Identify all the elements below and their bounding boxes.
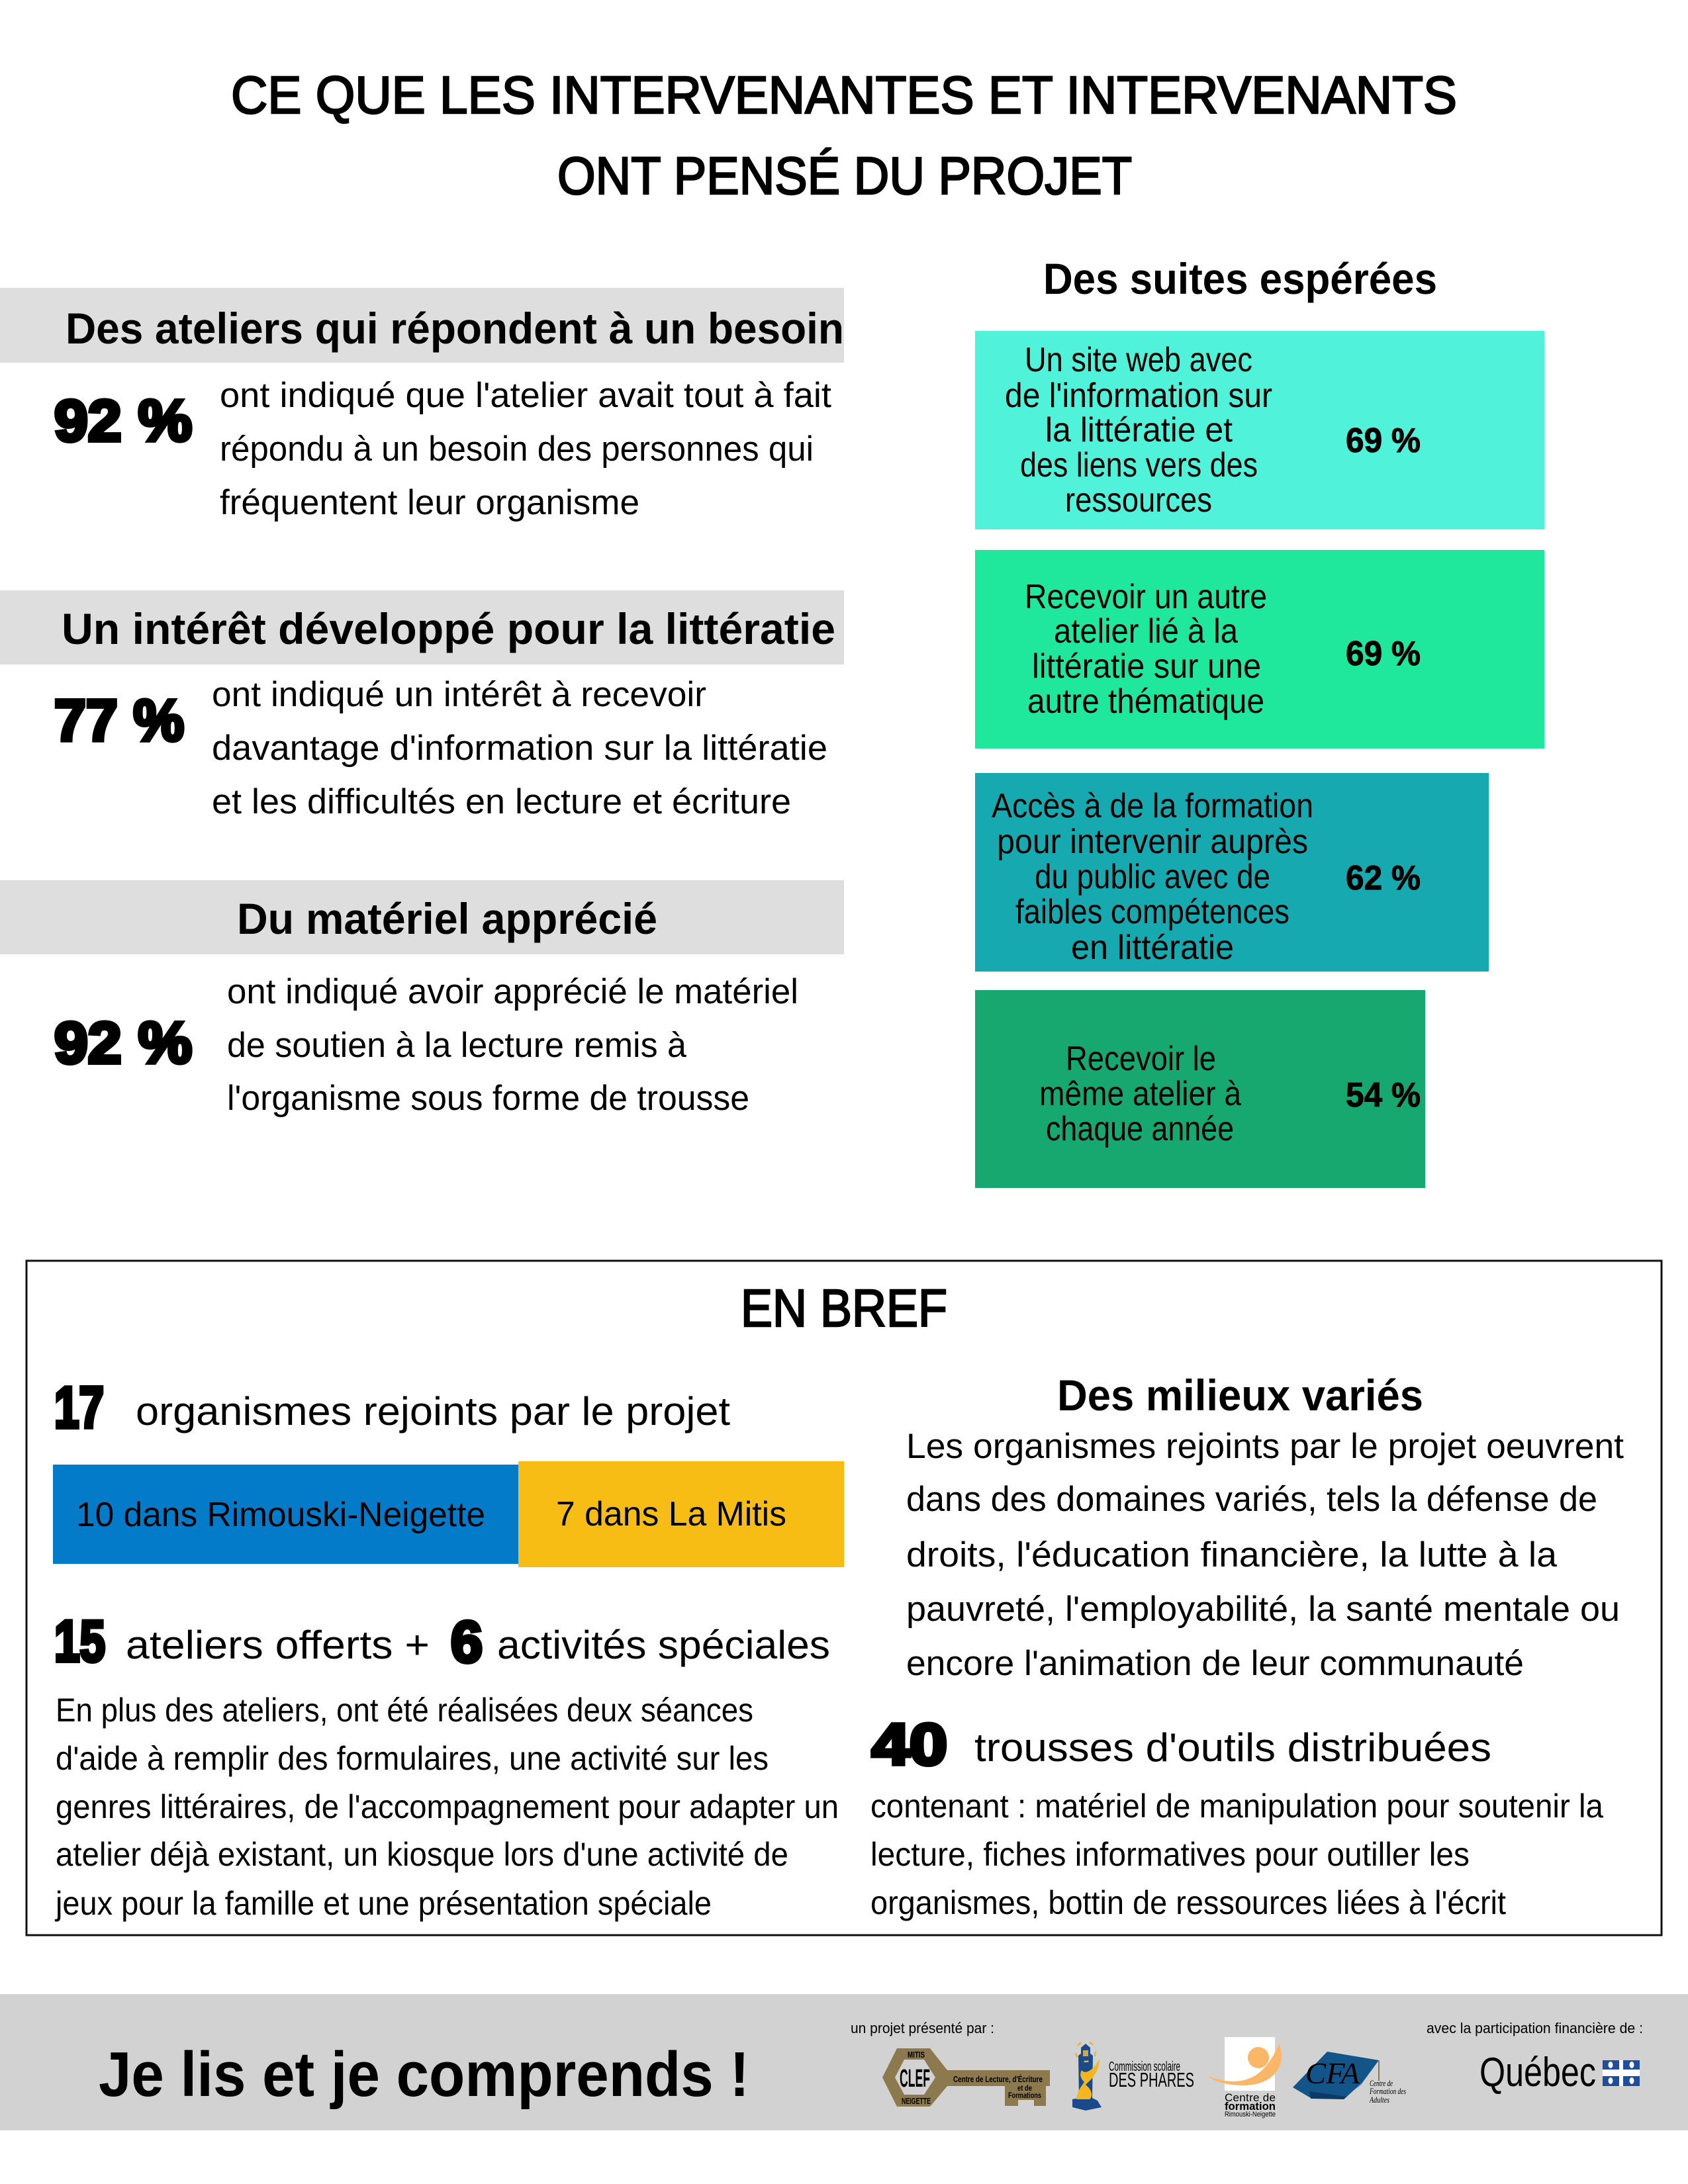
bar: autre atelier 69 %: atelier lié à la — [1054, 612, 1238, 651]
logo: CFA cap: Centre de — [1370, 2078, 1393, 2088]
heading: du matériel apprécié — [0, 880, 844, 954]
logo: commission scolaire des phares: Commission scolaire — [1109, 2060, 1180, 2074]
panel: intérêt — [0, 590, 844, 821]
bar: autre atelier 69 %: autre thématique — [1027, 682, 1264, 721]
stat: 40 trousses: 40 — [872, 1711, 947, 1777]
logo: commission scolaire des phares — [1109, 2060, 1194, 2091]
bar: formation 62 %: en littératie — [1071, 929, 1234, 967]
bar: même atelier 54 %: Recevoir le — [1066, 1040, 1216, 1078]
heading: des milieux variés: Des milieux variés — [1057, 1371, 1423, 1420]
logo: CFA cap: CFA — [1305, 2056, 1360, 2090]
logo: commission scolaire des phares: DES PHARES — [1109, 2068, 1194, 2091]
stat: 40 trousses: trousses d'outils distribuées — [974, 1725, 1491, 1770]
logo: centre de formation: Centre de — [1225, 2091, 1276, 2104]
logo: lighthouse — [1072, 2042, 1102, 2111]
heading: un intérêt développé pour la littératie: Un intérêt développé pour la littératie — [62, 604, 835, 653]
caption: présenté par: un projet présenté par : — [851, 2020, 994, 2036]
heading: un intérêt développé pour la littératie — [0, 590, 844, 664]
stat: 17 organismes: 17 — [54, 1375, 104, 1440]
logo: centre de formation — [1207, 2037, 1282, 2118]
heading: du matériel apprécié: Du matériel apprécié — [237, 894, 657, 943]
logo: CLEF key: et de — [1017, 2083, 1032, 2093]
logo: Québec: Québec — [1479, 2050, 1596, 2095]
stat: 92 %: 92 % — [54, 388, 192, 453]
bar: formation 62 %: faibles compétences — [1015, 893, 1289, 931]
footer title: Je lis et je comprends ! — [99, 2039, 749, 2110]
stat: 40 trousses — [872, 1711, 1491, 1777]
text block: matériel: de soutien à la lecture remis à — [227, 1026, 687, 1065]
bar: formation 62 %: Accès à de la formation — [992, 787, 1313, 825]
bar: site web 69 %: 69 % — [1346, 422, 1421, 460]
bar: même atelier 54 %: 54 % — [1346, 1076, 1421, 1115]
text block: matériel: ont indiqué avoir apprécié le matériel — [227, 972, 798, 1011]
bar: autre atelier 69 %: Recevoir un autre — [1025, 578, 1267, 616]
bar chart: suites espérées — [975, 331, 1544, 1188]
stacked bar: répartition des organismes: 7 dans La Mitis — [556, 1495, 786, 1533]
text block: intérêt — [212, 675, 827, 821]
panel: en bref — [26, 1261, 1662, 1935]
text block: ateliers: d'aide à remplir des formulaires, une activité sur les — [56, 1740, 769, 1777]
text block: intérêt: ont indiqué un intérêt à recevoir — [212, 675, 706, 714]
text block: trousses: organismes, bottin de ressources liées à l'écrit — [870, 1884, 1506, 1921]
bar: formation 62 %: pour intervenir auprès — [997, 823, 1308, 861]
bar: site web 69 %: de l'information sur — [1005, 377, 1272, 415]
text block: trousses: lecture, fiches informatives pour outiller les — [870, 1836, 1470, 1873]
stacked bar: répartition des organismes — [53, 1461, 844, 1567]
logo: CFA cap — [1293, 2052, 1406, 2105]
stat: 92 %: 92 % — [54, 1010, 192, 1075]
stat: 15 ateliers et 6 activités: ateliers offerts + — [126, 1623, 430, 1667]
stat: 15 ateliers et 6 activités: 15 — [54, 1608, 105, 1674]
bar: site web 69 %: ressources — [1065, 481, 1212, 520]
heading: en bref: EN BREF — [741, 1279, 947, 1338]
panel: matériel — [0, 880, 844, 1118]
text block: trousses: contenant : matériel de manipulation pour soutenir la — [870, 1788, 1603, 1825]
text block: ateliers: genres littéraires, de l'accompagnement pour adapter un — [56, 1788, 839, 1825]
text block: milieux: encore l'animation de leur communauté — [906, 1644, 1524, 1683]
logo: CLEF key — [882, 2048, 1050, 2107]
bar: site web 69 %: Un site web avec — [1025, 341, 1252, 379]
stat: 15 ateliers et 6 activités — [54, 1608, 830, 1674]
text block: milieux: pauvreté, l'employabilité, la santé mentale ou — [906, 1590, 1620, 1629]
bar: autre atelier 69 % — [975, 550, 1544, 749]
text block: milieux: droits, l'éducation financière, la lutte à la — [906, 1535, 1558, 1574]
text block: intérêt: davantage d'information sur la littératie — [212, 729, 827, 768]
heading: des ateliers qui répondent à un besoin: Des ateliers qui répondent à un besoin — [66, 304, 844, 353]
bar: site web 69 % — [975, 331, 1544, 529]
panel: besoin — [0, 288, 844, 522]
text block: ateliers — [54, 1692, 839, 1922]
bar: même atelier 54 % — [975, 990, 1425, 1188]
bar: site web 69 %: la littératie et — [1045, 411, 1233, 449]
title: CE QUE LES INTERVENANTES ET INTERVENANTS — [231, 66, 1457, 124]
text block: ateliers: jeux pour la famille et une présentation spéciale — [54, 1885, 712, 1922]
text block: matériel: l'organisme sous forme de trousse — [227, 1079, 749, 1118]
text block: besoin: ont indiqué que l'atelier avait tout à fait — [220, 376, 831, 415]
stat: 17 organismes: organismes rejoints par le projet — [136, 1389, 730, 1433]
footer — [0, 1994, 1688, 2130]
text block: milieux: Les organismes rejoints par le projet oeuvrent — [906, 1427, 1624, 1466]
logo: centre de formation: Rimouski-Neigette — [1225, 2111, 1276, 2118]
logo: CLEF key: CLEF — [900, 2065, 930, 2093]
logo: CLEF key: NEIGETTE — [902, 2096, 931, 2106]
text block: besoin: répondu à un besoin des personnes qui — [220, 430, 814, 469]
caption: participation financière: avec la participation financière de : — [1427, 2020, 1643, 2036]
stacked bar: répartition des organismes: 10 dans Rimouski-Neigette — [76, 1496, 485, 1534]
title: ONT PENSÉ DU PROJET — [557, 146, 1132, 205]
text block: milieux: dans des domaines variés, tels la défense de — [906, 1480, 1597, 1519]
logo: centre de formation: formation — [1225, 2100, 1276, 2113]
bar: formation 62 % — [975, 773, 1489, 972]
text block: besoin: fréquentent leur organisme — [220, 483, 639, 522]
logo: CLEF key: MITIS — [908, 2050, 925, 2060]
bar: formation 62 %: 62 % — [1346, 859, 1421, 897]
logo: CFA cap: Formation des — [1369, 2086, 1406, 2096]
bar: autre atelier 69 %: 69 % — [1346, 635, 1421, 673]
text block: ateliers: En plus des ateliers, ont été réalisées deux séances — [56, 1692, 753, 1729]
logo: CFA cap: Adultes — [1369, 2095, 1389, 2105]
text block: trousses — [870, 1788, 1603, 1921]
title — [231, 66, 1457, 205]
stat: 77 %: 77 % — [54, 688, 184, 753]
text block: intérêt: et les difficultés en lecture et écriture — [212, 782, 791, 821]
stat: 15 ateliers et 6 activités: 6 — [451, 1609, 483, 1674]
bar: formation 62 %: du public avec de — [1035, 858, 1270, 896]
bar: site web 69 %: des liens vers des — [1020, 446, 1258, 484]
text block: milieux — [906, 1427, 1624, 1683]
logo: CLEF key: Formations — [1008, 2091, 1041, 2100]
stat: 15 ateliers et 6 activités: activités spéciales — [497, 1623, 830, 1667]
stat: 17 organismes — [54, 1375, 730, 1440]
logo: CLEF key: Centre de Lecture, d'Écriture — [953, 2074, 1043, 2084]
text block: ateliers: atelier déjà existant, un kiosque lors d'une activité de — [56, 1836, 788, 1873]
text block: matériel — [227, 972, 798, 1118]
heading: des suites espérées: Des suites espérées — [1043, 254, 1437, 303]
bar: même atelier 54 %: même atelier à — [1039, 1075, 1241, 1113]
text block: besoin — [220, 376, 831, 522]
heading: des ateliers qui répondent à un besoin — [0, 288, 844, 363]
bar: même atelier 54 %: chaque année — [1046, 1110, 1234, 1148]
bar: autre atelier 69 %: littératie sur une — [1032, 647, 1261, 686]
